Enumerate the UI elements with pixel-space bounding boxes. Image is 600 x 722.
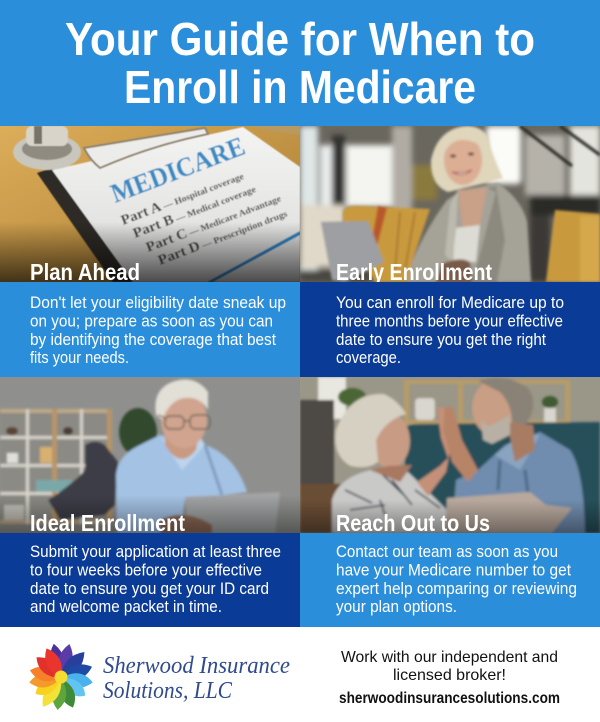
caption background [300, 533, 600, 627]
text: broker message: Work with our independent and [341, 649, 558, 666]
photo: couple high five [300, 377, 600, 533]
text: early enrollment body [336, 294, 564, 367]
title [65, 13, 535, 113]
text: early enrollment body: date to ensure you get the right [336, 331, 546, 349]
photo: medicare clipboard and stethoscope: Part C — Medicare Advantage [144, 190, 283, 256]
text: reach out body: Contact our team as soon as you [336, 543, 558, 561]
heading: reach out: Reach Out to Us [336, 510, 490, 536]
panel: plan ahead [0, 126, 300, 377]
photo: medicare clipboard and stethoscope: MEDICARE [107, 131, 249, 209]
text: broker message [341, 649, 558, 684]
heading: ideal enrollment: Ideal Enrollment [30, 510, 185, 536]
caption background [0, 282, 300, 377]
caption background [300, 282, 600, 377]
text: ideal enrollment body [30, 543, 281, 616]
text: early enrollment body: coverage. [336, 349, 401, 367]
text: ideal enrollment body: Submit your application at least three [30, 543, 281, 561]
caption background [0, 533, 300, 627]
heading: early enrollment: Early Enrollment [336, 259, 492, 285]
text: reach out body: your plan options. [336, 598, 457, 616]
text: early enrollment body: You can enroll for Medicare up to [336, 294, 564, 312]
text: plan ahead body [30, 294, 286, 367]
text: website: sherwoodinsurancesolutions.com [339, 690, 560, 707]
photo: medicare clipboard and stethoscope [0, 126, 300, 282]
logo wordmark: Sherwood Insurance [103, 653, 290, 679]
photo: medicare clipboard and stethoscope: Part A — Hospital coverage [119, 168, 246, 229]
text: broker message: licensed broker! [393, 667, 506, 684]
title: Your Guide for When to [65, 13, 535, 65]
text: plan ahead body: fits your needs. [30, 349, 129, 367]
panel: early enrollment [300, 126, 600, 377]
photo: medicare clipboard and stethoscope: Part B — Medical coverage [131, 181, 258, 242]
text: reach out body [336, 543, 577, 616]
logo [28, 642, 290, 711]
photo: medicare clipboard and stethoscope: Part D — Prescription drugs [156, 205, 290, 269]
photo: man with tablet [0, 377, 300, 533]
text: plan ahead body: Don't let your eligibility date sneak up [30, 294, 286, 312]
panel: ideal enrollment [0, 377, 300, 627]
text: plan ahead body: by identifying the coverage that best [30, 331, 276, 349]
icon: flower [28, 642, 94, 711]
title: Enroll in Medicare [124, 61, 476, 113]
text: ideal enrollment body: to four weeks before your effective [30, 562, 262, 580]
text: reach out body: have your Medicare number to get [336, 562, 571, 580]
panel: reach out [300, 377, 600, 627]
photo: woman with laptop [300, 126, 600, 282]
logo wordmark [103, 653, 290, 704]
heading: plan ahead: Plan Ahead [30, 259, 140, 285]
logo wordmark: Solutions, LLC [103, 678, 233, 704]
text: plan ahead body: on you; prepare as soon as you can [30, 312, 273, 330]
footer [28, 642, 560, 711]
text: ideal enrollment body: date to ensure you get your ID card [30, 580, 269, 598]
text: reach out body: expert help comparing or reviewing [336, 580, 577, 598]
text: early enrollment body: three months before your effective [336, 312, 563, 330]
header banner [0, 0, 600, 126]
text: ideal enrollment body: and welcome packet in time. [30, 598, 222, 616]
